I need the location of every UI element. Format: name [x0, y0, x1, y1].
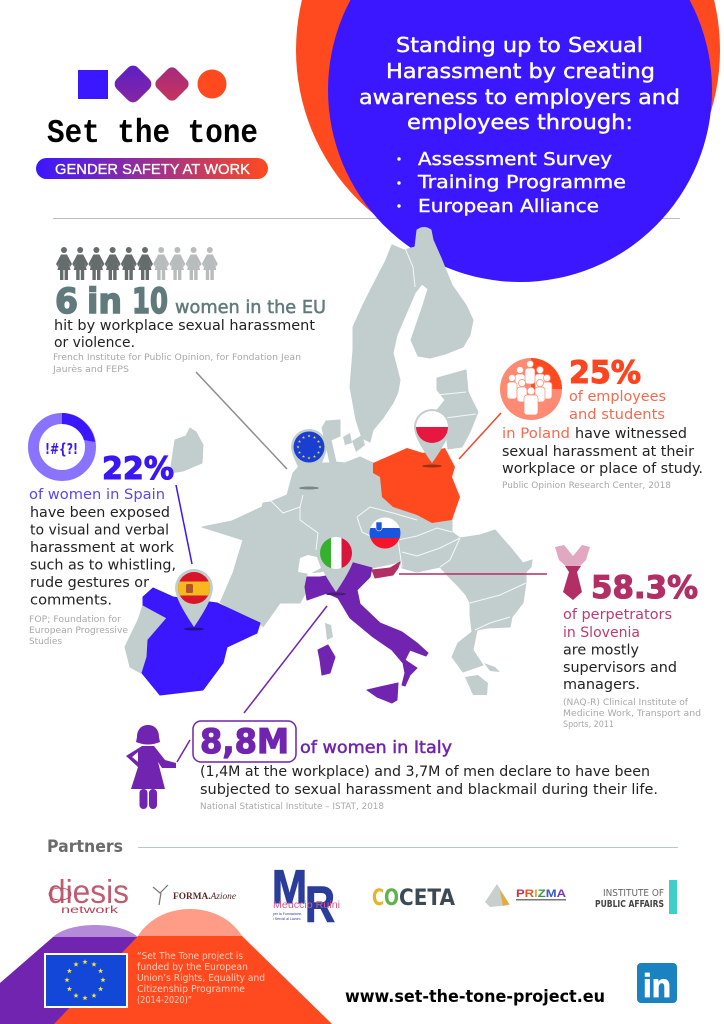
funding statement: (2014-2020)”: [137, 995, 192, 1006]
stat: 8,8M Italy: subjected to sexual harassment and blackmail during their life.: [200, 781, 658, 798]
stat: 25% Poland: in Poland: [502, 425, 570, 442]
source: National Statistical Institute – ISTAT, 2018: [200, 802, 384, 812]
logo: Meuccio Ruini: per la Formazione,: [273, 912, 302, 916]
stat: 8,8M Italy: 8,8M: [200, 722, 289, 762]
Nordic countries: [350, 228, 473, 442]
logo: Set the tone: [36, 63, 268, 179]
islands: [325, 433, 500, 695]
Baltic states: [437, 370, 478, 449]
stat: 58.3% Slovenia: Sports, 2011: [563, 720, 614, 730]
logo wordmark: Set the tone: [47, 115, 258, 152]
stat: 22% Spain: have been exposed: [30, 504, 170, 521]
description: (1,4M at the workplace) and 3,7M of men declare to have been: [200, 763, 650, 780]
big number: 6: [55, 282, 78, 322]
intro text: awareness to employers and: [359, 85, 680, 109]
big number: 25%: [569, 355, 641, 391]
logo tagline pill: GENDER SAFETY AT WORK: [55, 162, 250, 178]
icon: LinkedIn: in: [643, 967, 671, 1004]
people icons: 6 of 10: [56, 247, 218, 280]
funding statement: funded by the European: [137, 962, 248, 973]
stat: 6 in 10 women in the EU: women in the EU: [175, 297, 326, 318]
Slovenia: [372, 562, 400, 578]
icon: woman presenter: [126, 725, 176, 809]
Switzerland gap: [298, 555, 321, 574]
footer shapes: [0, 909, 332, 1024]
stat: 22% Spain: [29, 413, 176, 647]
logo: Institute of Public Affairs: [595, 880, 677, 914]
stat: 58.3% Slovenia: [555, 545, 701, 730]
pin: Slovenia flag: [369, 517, 401, 549]
logo: Meuccio Ruini: M: [272, 860, 307, 913]
funding statement: “Set The Tone project is: [137, 951, 243, 962]
funding statement: Citizenship Programme: [137, 984, 245, 995]
map of Europe: [125, 228, 532, 703]
description: of employees: [569, 388, 666, 405]
donut chart icon: !#{?!: [45, 440, 78, 458]
logo: Institute of Public Affairs: INSTITUTE OF: [603, 888, 664, 899]
intro text: Training Programme: [417, 172, 626, 193]
stat: 22% Spain: such as to whistling,: [30, 556, 176, 574]
EU flag: [45, 954, 127, 1007]
donut chart icon: [34, 413, 95, 476]
intro text: European Alliance: [418, 196, 599, 217]
funding statement: [137, 951, 265, 1006]
stat: 22% Spain: comments.: [30, 592, 112, 608]
stat: 22% Spain: to visual and verbal: [30, 522, 169, 538]
stat: 58.3% Slovenia: supervisors and: [563, 659, 677, 676]
source: Public Opinion Research Center, 2018: [502, 481, 671, 491]
logo: Meuccio Ruini: [272, 860, 340, 933]
logo shapes: [78, 63, 226, 105]
pin: Poland flag: [414, 409, 450, 468]
Italy: [305, 562, 428, 703]
continental Europe: [202, 420, 532, 672]
big number: in: [87, 282, 122, 322]
big number: 10: [132, 282, 168, 322]
intro text: Assessment Survey: [418, 149, 612, 170]
stat: 58.3% Slovenia: managers.: [563, 676, 640, 693]
intro text: employees through:: [407, 110, 633, 134]
website URL: www.set-the-tone-project.eu: [345, 987, 605, 1007]
big number: 58.3%: [591, 570, 698, 606]
pin: EU flag: [291, 429, 327, 490]
logo: FORMA.Azione: FORMA.Azione: [173, 891, 236, 901]
people donut icon: [500, 358, 562, 420]
pin: Spain flag: [175, 569, 213, 630]
blue intro circle: [328, 0, 712, 282]
logo: FORMA.Azione: [153, 885, 236, 905]
pin: Italy flag: [320, 537, 353, 596]
stat: 6 in 10 women in the EU: [52, 247, 326, 375]
logo: COCETA: CETA: [399, 886, 455, 911]
logo: PRIZMA: [485, 884, 566, 907]
Spain: [142, 588, 260, 695]
stat: 25% Poland: [500, 355, 703, 491]
intro text: Harassment by creating: [386, 59, 655, 83]
partners heading: Partners: [47, 837, 123, 856]
decorative orange circle: [296, 0, 720, 262]
description: of perpetrators: [563, 606, 672, 623]
stat: 25% Poland: and students: [569, 406, 665, 423]
stat: 6 in 10 women in the EU: or violence.: [54, 334, 135, 351]
stat: 8,8M Italy: [126, 721, 658, 812]
logo: COCETA: O: [384, 886, 399, 911]
logo: PRIZMA: PRIZMA: [516, 888, 566, 900]
big number: 22%: [102, 451, 174, 487]
intro text: [359, 33, 680, 217]
stat: 8,8M Italy: of women in Italy: [300, 738, 452, 758]
logo tagline pill: [36, 158, 268, 179]
icon: LinkedIn: [637, 963, 677, 1004]
stat: 22% Spain: Studies: [29, 637, 62, 647]
Ireland: [170, 428, 203, 473]
source: (NAQ-R) Clinical Institute of: [563, 698, 689, 708]
divider: [53, 218, 680, 220]
purple shape: [0, 925, 140, 1024]
logo: Meuccio Ruini: R: [305, 876, 335, 933]
logo: COCETA: C: [372, 886, 384, 911]
stat: 58.3% Slovenia: are mostly: [563, 642, 639, 658]
stat: 58.3% Slovenia: in Slovenia: [563, 624, 640, 641]
big number: [55, 282, 168, 322]
logo: Meuccio Ruini: Meuccio Ruini: [273, 900, 340, 911]
stat: 22% Spain: harassment at work: [30, 539, 175, 556]
funding statement: Union’s Rights, Equality and: [137, 973, 265, 984]
tie icon: [555, 545, 590, 600]
logo: Meuccio Ruini: i Servizi al Lavoro: [273, 917, 301, 921]
stat: 22% Spain: rude gestures or: [30, 574, 149, 591]
source: French Institute for Public Opinion, for Fondation Jean: [53, 353, 301, 363]
logo: Institute of Public Affairs: PUBLIC AFFAIRS: [595, 899, 664, 910]
Portugal: [125, 605, 167, 673]
orange shape: [54, 909, 332, 1024]
description: of women in Spain: [29, 486, 165, 503]
logo: diesis network: network: [61, 905, 120, 916]
connector lines: [176, 372, 547, 762]
stat: 58.3% Slovenia: Medicine Work, Transport and: [563, 709, 701, 719]
description: hit by workplace sexual harassment: [54, 317, 315, 334]
stat: 25% Poland: workplace or place of study.: [502, 460, 703, 477]
stat: 22% Spain: European Progressive: [29, 626, 128, 636]
partner logos: [48, 860, 677, 933]
highlighted figure box: [193, 721, 296, 762]
stat: 6 in 10 women in the EU: Jaurès and FEPS: [52, 364, 129, 375]
source: FOP; Foundation for: [29, 615, 121, 625]
logo: diesis network: diesis: [48, 873, 129, 910]
Poland: [373, 448, 460, 523]
stat: 25% Poland: have witnessed: [575, 425, 687, 442]
logo: COCETA: [372, 886, 455, 911]
intro text: Standing up to Sexual: [396, 33, 643, 57]
stat: 25% Poland: sexual harassment at their: [502, 443, 694, 460]
